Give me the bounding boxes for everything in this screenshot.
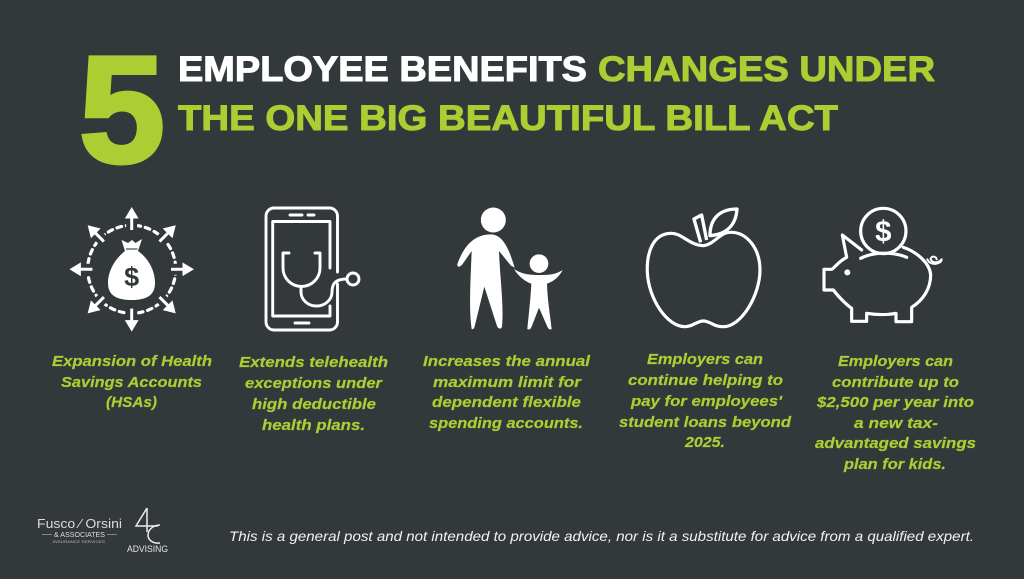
text: student loans benefit: continue helping to bbox=[628, 372, 783, 389]
text: telehealth benefit: Extends telehealth bbox=[239, 354, 388, 371]
title: EMPLOYEE BENEFITS bbox=[178, 49, 587, 89]
icon: money bag with arrows bbox=[70, 208, 193, 331]
logo: 4C Advising bbox=[127, 508, 168, 554]
title bbox=[178, 49, 935, 138]
text: kids savings benefit: contribute up to bbox=[832, 374, 959, 391]
icon: parent and child bbox=[457, 207, 563, 330]
text: HSA benefit: Savings Accounts bbox=[61, 374, 202, 391]
text: telehealth benefit: high deductible bbox=[252, 396, 376, 413]
text: kids savings benefit: plan for kids. bbox=[843, 456, 946, 473]
icon: piggy bank with coin bbox=[824, 208, 942, 322]
disclaimer: This is a general post and not intended to provide advice, nor is it a substitute for advice from a qualified expert. bbox=[229, 529, 974, 544]
text: telehealth benefit: exceptions under bbox=[245, 375, 383, 392]
icon: phone with stethoscope bbox=[266, 208, 359, 330]
text: telehealth benefit: health plans. bbox=[262, 417, 365, 434]
icon: money bag with arrows: $ bbox=[124, 262, 139, 292]
text: dependent FSA benefit bbox=[423, 353, 591, 432]
text: kids savings benefit bbox=[815, 353, 976, 473]
text: student loans benefit: 2025. bbox=[684, 434, 725, 451]
text: kids savings benefit: Employers can bbox=[838, 353, 953, 370]
text: kids savings benefit: advantaged savings bbox=[815, 435, 976, 452]
logo: Fusco Orsini and Associates: Fusco ⁄ Orsini bbox=[37, 517, 122, 531]
icon: piggy bank with coin: $ bbox=[875, 215, 891, 248]
logo: Fusco Orsini and Associates bbox=[37, 517, 122, 544]
text: student loans benefit: student loans beyond bbox=[619, 414, 792, 431]
text: student loans benefit: pay for employees' bbox=[630, 393, 782, 410]
big number 5: 5 bbox=[79, 25, 165, 195]
title: CHANGES UNDER bbox=[598, 49, 935, 89]
text: HSA benefit bbox=[52, 353, 212, 411]
title: THE ONE BIG BEAUTIFUL BILL ACT bbox=[178, 98, 838, 138]
text: kids savings benefit: $2,500 per year into bbox=[816, 394, 974, 411]
text: telehealth benefit bbox=[239, 354, 388, 434]
icon: apple bbox=[647, 209, 760, 327]
text: dependent FSA benefit: spending accounts. bbox=[429, 415, 583, 432]
text: dependent FSA benefit: dependent flexible bbox=[432, 394, 581, 411]
text: dependent FSA benefit: Increases the annual bbox=[423, 353, 591, 370]
text: HSA benefit: (HSAs) bbox=[106, 394, 157, 411]
logo: 4C Advising: ADVISING bbox=[127, 544, 168, 554]
text: dependent FSA benefit: maximum limit for bbox=[433, 374, 582, 391]
text: HSA benefit: Expansion of Health bbox=[52, 353, 212, 370]
logo: Fusco Orsini and Associates: INSURANCE SERVICES bbox=[53, 539, 105, 544]
text: kids savings benefit: a new tax- bbox=[854, 415, 938, 432]
logo: Fusco Orsini and Associates: & ASSOCIATES bbox=[54, 530, 105, 539]
text: student loans benefit bbox=[619, 351, 792, 451]
text: student loans benefit: Employers can bbox=[647, 351, 763, 368]
